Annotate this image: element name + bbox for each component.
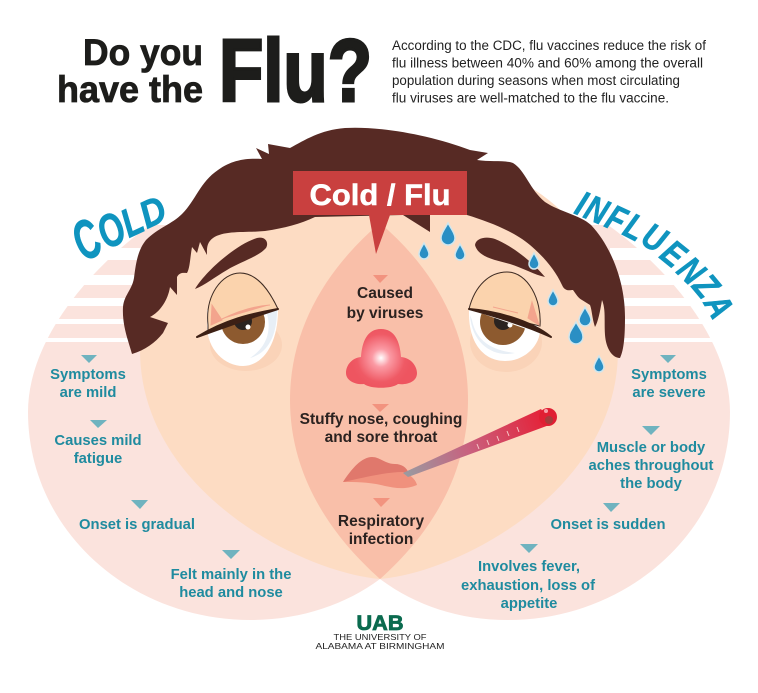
stripes — [20, 248, 740, 342]
intro text — [392, 38, 706, 106]
influenza symptoms: the body — [620, 476, 683, 492]
heading: influenza: F — [600, 196, 634, 241]
influenza symptoms: Symptoms — [631, 367, 707, 383]
heading: influenza: L — [618, 205, 652, 249]
heading: influenza: E — [653, 232, 695, 276]
panel: cold circle — [28, 225, 380, 620]
influenza symptoms: aches throughout — [589, 458, 714, 474]
logo: UAB: UAB — [356, 612, 404, 635]
cold symptoms: Felt mainly in the — [171, 567, 291, 583]
cold symptoms: fatigue — [74, 451, 122, 467]
title: Do you — [83, 32, 203, 73]
left eye — [197, 273, 282, 371]
cold symptoms: Causes mild — [54, 433, 142, 449]
heading: cold — [62, 187, 173, 273]
nose — [346, 329, 417, 388]
influenza symptoms: appetite — [501, 596, 557, 612]
heading: cold: L — [114, 197, 150, 246]
logo: UAB: ALABAMA AT BIRMINGHAM — [316, 641, 444, 651]
intro text: flu illness between 40% and 60% among the overall — [392, 56, 703, 70]
callout: Cold / Flu — [293, 171, 467, 254]
influenza symptoms: exhaustion, loss of — [461, 578, 595, 594]
heading: influenza: N — [670, 248, 714, 293]
influenza symptoms: are severe — [632, 385, 706, 401]
title: Flu? — [219, 21, 372, 120]
heading: influenza: N — [579, 187, 615, 233]
panel: influenza circle — [380, 225, 730, 620]
eyebrow left — [195, 238, 267, 289]
shared symptoms: and sore throat — [325, 429, 437, 446]
shared symptoms: by viruses — [347, 305, 423, 322]
heading: influenza — [570, 183, 742, 325]
heading: influenza: Z — [685, 265, 729, 307]
heading: cold: D — [132, 187, 173, 237]
cold symptoms — [50, 355, 291, 601]
heading: cold: C — [62, 207, 112, 273]
influenza symptoms: Involves fever, — [478, 559, 580, 575]
shared symptoms: Stuffy nose, coughing — [300, 411, 462, 428]
logo: UAB — [316, 612, 444, 651]
cold symptoms: head and nose — [179, 585, 283, 601]
title: have the — [57, 69, 203, 110]
thermometer — [403, 408, 557, 477]
cold symptoms: Onset is gradual — [79, 517, 195, 533]
influenza symptoms: Muscle or body — [597, 440, 706, 456]
heading: influenza: I — [570, 183, 594, 224]
shared symptoms: Caused — [357, 285, 413, 302]
cold symptoms: Symptoms — [50, 367, 126, 383]
callout: Cold / Flu: Cold / Flu — [310, 179, 450, 212]
lips — [343, 457, 417, 488]
cold symptoms: are mild — [60, 385, 116, 401]
panel: overlap lens — [290, 223, 468, 579]
intro text: population during seasons when most circulating — [392, 73, 680, 88]
influenza symptoms — [461, 355, 714, 612]
heading: cold: O — [89, 202, 134, 259]
shared symptoms: Respiratory — [338, 513, 424, 530]
sweat drops — [419, 223, 604, 372]
intro text: flu viruses are well-matched to the flu vaccine. — [392, 90, 669, 106]
shared symptoms — [300, 275, 462, 548]
title — [57, 21, 372, 120]
influenza symptoms: Onset is sudden — [550, 517, 666, 533]
hair — [123, 128, 625, 358]
panel: face — [140, 150, 618, 579]
heading: influenza: A — [696, 286, 742, 325]
eyebrow right — [475, 238, 545, 277]
right eye — [469, 272, 551, 372]
shared symptoms: infection — [349, 531, 413, 548]
logo: UAB: THE UNIVERSITY OF — [334, 632, 426, 642]
intro text: According to the CDC, flu vaccines reduce the risk of — [392, 38, 706, 53]
heading: influenza: U — [635, 215, 675, 261]
